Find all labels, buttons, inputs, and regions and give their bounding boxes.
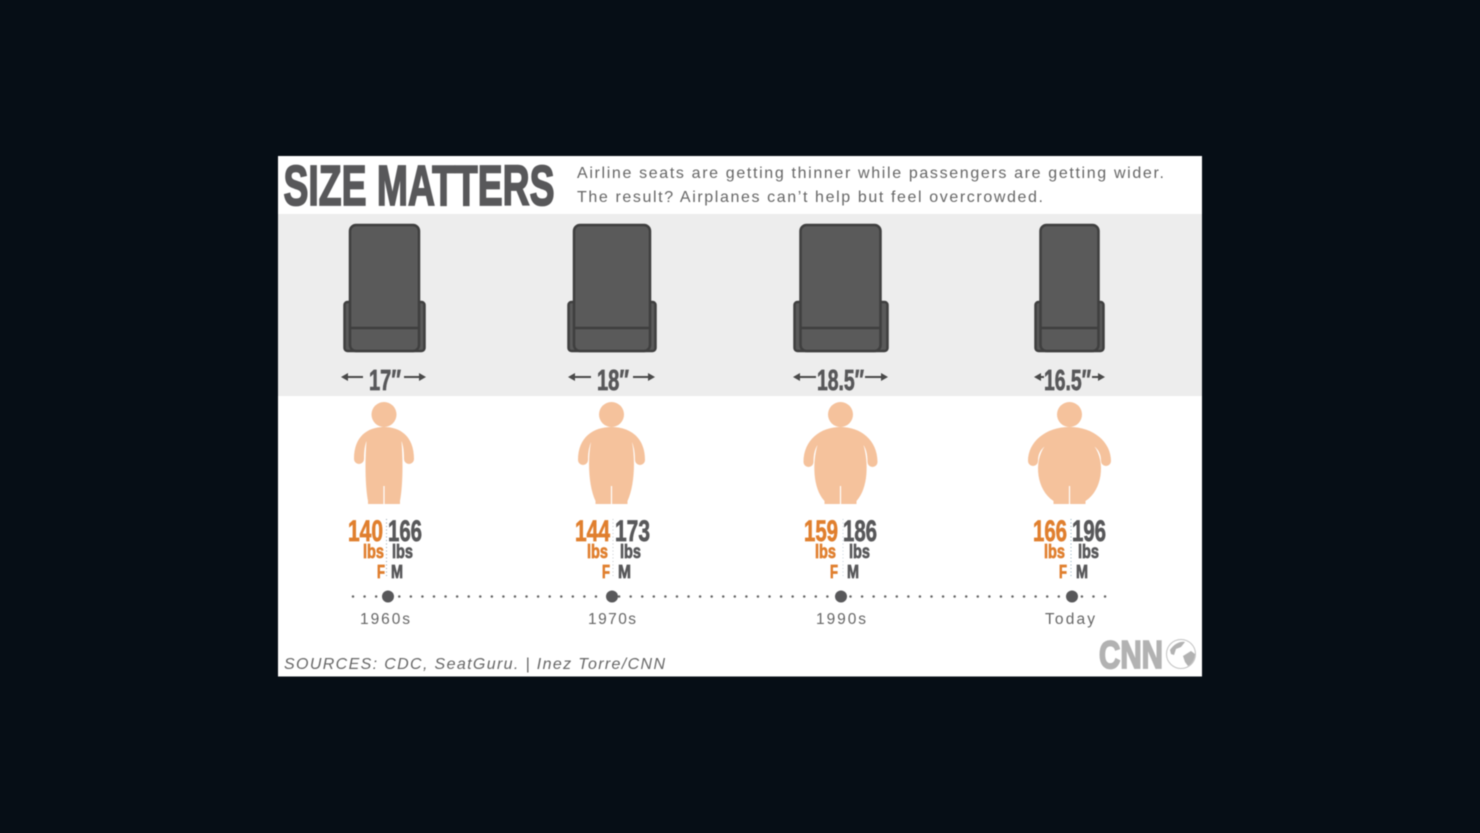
intro text: Airline seats are getting thinner while passengers are getting wider. [577,165,1164,182]
weights: today: F [1059,562,1067,582]
weights: 1990s: 159 [804,515,838,548]
weights: today: 196 [1072,515,1106,548]
weights: 1990s [804,515,877,582]
weights: 1970s: 144 [575,515,610,548]
person: 1960s [354,402,414,504]
source line: SOURCES: CDC, SeatGuru. | Inez Torre/CNN [284,656,665,673]
seat width: 18.5 inches: 18.5″ [817,365,864,397]
weights: 1970s: M [618,562,631,582]
weights: 1960s: F [377,562,385,582]
seat width: 17 inches [341,365,426,397]
weights: 1960s: lbs [363,542,384,563]
person: 1990s [804,402,878,504]
seat width: 18 inches [568,365,655,397]
seat: 1990s [794,225,888,351]
intro text: The result? Airplanes can’t help but feel overcrowded. [577,189,1043,206]
weights: 1970s: lbs [620,542,641,563]
weights: 1970s: lbs [587,542,608,563]
weights: today: lbs [1044,542,1065,563]
seat width: 16.5 inches: 16.5″ [1044,365,1091,397]
weights: 1990s: lbs [849,542,870,563]
weights: 1970s: F [602,562,610,582]
weights: 1960s [348,515,422,582]
seat: 1970s [568,225,656,351]
weights: 1960s: 166 [388,515,422,548]
CNN logo: CNN [1099,634,1163,677]
seat width: 17 inches: 17″ [369,365,401,397]
weights: today: 166 [1033,515,1067,548]
weights: 1970s: 173 [615,515,650,548]
title: SIZE MATTERS [284,154,554,218]
panel: infographic card [278,154,1202,677]
weights: today: lbs [1078,542,1099,563]
weights: today: M [1076,562,1088,582]
timeline: 1990s [816,611,866,628]
timeline: 1970s [588,611,636,628]
seat: 1960s [344,225,424,351]
timeline: Today [1045,611,1095,628]
intro text [577,165,1164,206]
weights: 1990s: F [830,562,838,582]
timeline: 1960s [360,611,410,628]
weights: 1990s: M [847,562,859,582]
weights: 1990s: 186 [843,515,877,548]
weights: 1960s: M [391,562,403,582]
person: today [1028,402,1111,504]
person: 1970s [578,402,645,504]
weights: 1960s: 140 [348,515,383,548]
seat width: 18 inches: 18″ [597,365,629,397]
seat: today [1036,225,1104,351]
weights: 1960s: lbs [392,542,413,563]
weights: 1970s [575,515,650,582]
weights: today [1033,515,1106,582]
weights: 1990s: lbs [815,542,836,563]
timeline [353,590,1106,628]
